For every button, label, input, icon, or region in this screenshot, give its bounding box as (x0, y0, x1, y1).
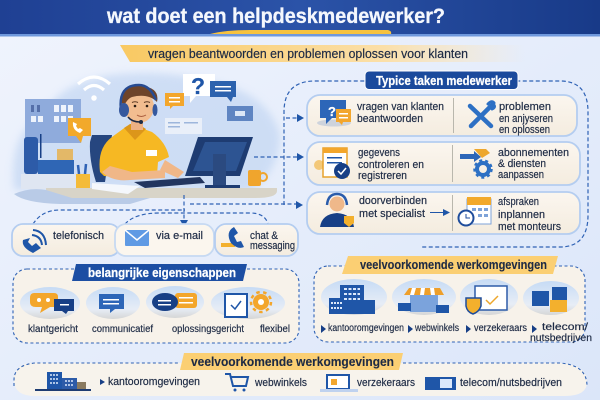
icon: small chat bubble (165, 93, 184, 109)
task row 1: en oplossen (499, 124, 550, 136)
channel: telefonisch (12, 224, 120, 256)
contact channels (12, 224, 298, 256)
item: telecom: telecom/nutsbedrijven (460, 377, 562, 389)
item: verzekeraars (320, 375, 415, 392)
task row 1: problemen (499, 101, 551, 113)
icon: calendar and clock (458, 197, 491, 226)
icon: question chat (317, 100, 351, 126)
task row 3: met monteurs (498, 221, 561, 233)
header band (0, 0, 600, 36)
trait: flexibel (211, 287, 290, 335)
bullets (321, 325, 537, 333)
trait: flexibel: flexibel (260, 324, 290, 335)
item: kantooromgevingen: kantooromgevingen (108, 376, 200, 388)
channel: chat and messaging (215, 224, 298, 256)
channel: chat and messaging: messaging (250, 240, 295, 252)
icon: question bubble (183, 73, 215, 103)
env: telecom: telecom/ (542, 322, 588, 333)
icon: building (25, 99, 81, 143)
trait: klantgericht: klantgericht (28, 324, 78, 335)
arrowheads (180, 114, 304, 227)
env: verzekeraars (460, 279, 527, 334)
icon: document check (314, 148, 350, 179)
illustration: helpdesk employee at desk (13, 73, 280, 204)
subtitle banner: vragen beantwoorden en problemen oplossen voor klanten (148, 47, 468, 61)
task row 1: vragen van klanten (357, 101, 444, 113)
task row 2: abonnementen (498, 147, 569, 159)
item: kantooromgevingen (35, 372, 200, 391)
channel: telefonisch: telefonisch (53, 230, 104, 242)
desk (46, 188, 277, 198)
task row 2: gegevens (358, 147, 400, 159)
mug (248, 170, 267, 186)
task row 2: aanpassen (498, 169, 544, 181)
env: webwinkels: webwinkels (414, 323, 459, 334)
env: kantoor (321, 279, 404, 334)
task row 2: controleren en (358, 159, 424, 171)
chair (90, 135, 112, 182)
icon: specialist (320, 194, 354, 227)
heading: tasks (365, 71, 518, 90)
trait: klantgericht (20, 287, 80, 335)
channel: via e-mail (115, 224, 214, 256)
env: verzekeraars: verzekeraars (474, 323, 527, 334)
screens in background (165, 106, 253, 134)
item: webwinkels: webwinkels (254, 377, 307, 389)
heading: veelvoorkomende werkomgevingen (191, 355, 394, 369)
task row 1: beantwoorden (357, 113, 423, 125)
heading (342, 256, 558, 274)
trait: communicatief (86, 287, 153, 335)
heading: veelvoorkomende werkomgevingen (360, 258, 547, 272)
task row 3: afspraken (498, 196, 539, 208)
icon: message bubble (210, 81, 236, 102)
env: kantoor: kantooromgevingen (328, 323, 404, 334)
title: wat doet een helpdeskmedewerker? (106, 5, 445, 28)
icon: arrow and gear (460, 149, 492, 178)
icon: tools (470, 102, 494, 126)
panel: bottom werkomgevingen (14, 353, 587, 396)
env: telecom: nutsbedrijven (530, 333, 592, 344)
pen cup (76, 164, 90, 188)
panel: typical tasks (284, 71, 588, 247)
item: webwinkels (225, 374, 307, 392)
icon: phone bubble (68, 118, 91, 143)
item: verzekeraars: verzekeraars (357, 377, 415, 389)
heading: belangrijke eigenschappen (88, 266, 236, 280)
channel: chat and messaging: chat & (250, 230, 279, 242)
icon: question chat: ? (328, 104, 336, 119)
employee (100, 85, 184, 180)
env: telecom (523, 281, 592, 344)
task row 2 (307, 142, 580, 185)
keyboard (134, 177, 205, 188)
background cloud (13, 73, 280, 192)
subtitle banner (120, 45, 525, 62)
trait: oplossingsgericht: oplossingsgericht (172, 324, 244, 335)
arrows from illustration to tasks (33, 118, 301, 224)
task row 1 (307, 95, 577, 136)
task row 3: inplannen (498, 209, 545, 221)
icon: router and phone stack (21, 134, 79, 189)
task row 2: registreren (358, 170, 407, 182)
panel: veelvoorkomende werkomgevingen (314, 256, 592, 344)
papers (92, 183, 140, 194)
icon: question bubble: ? (191, 73, 205, 99)
task row 3 (307, 192, 580, 234)
env: webwinkels (392, 279, 459, 334)
task row 1: en anjyseren (499, 113, 553, 125)
trait: oplossingsgericht (146, 286, 244, 335)
heading: tasks: Typice taken medewerker (376, 74, 512, 88)
panel: belangrijke eigenschappen (13, 264, 299, 343)
trait: communicatief: communicatief (92, 324, 153, 335)
icon: wifi (78, 77, 110, 100)
item: telecom (425, 377, 562, 390)
arrow (430, 209, 450, 216)
task row 3: doorverbinden (359, 195, 427, 207)
monitor (185, 137, 253, 188)
channel: via e-mail: via e-mail (156, 230, 203, 242)
task row 3: met specialist (359, 208, 425, 220)
task row 2: & diensten (498, 158, 546, 170)
